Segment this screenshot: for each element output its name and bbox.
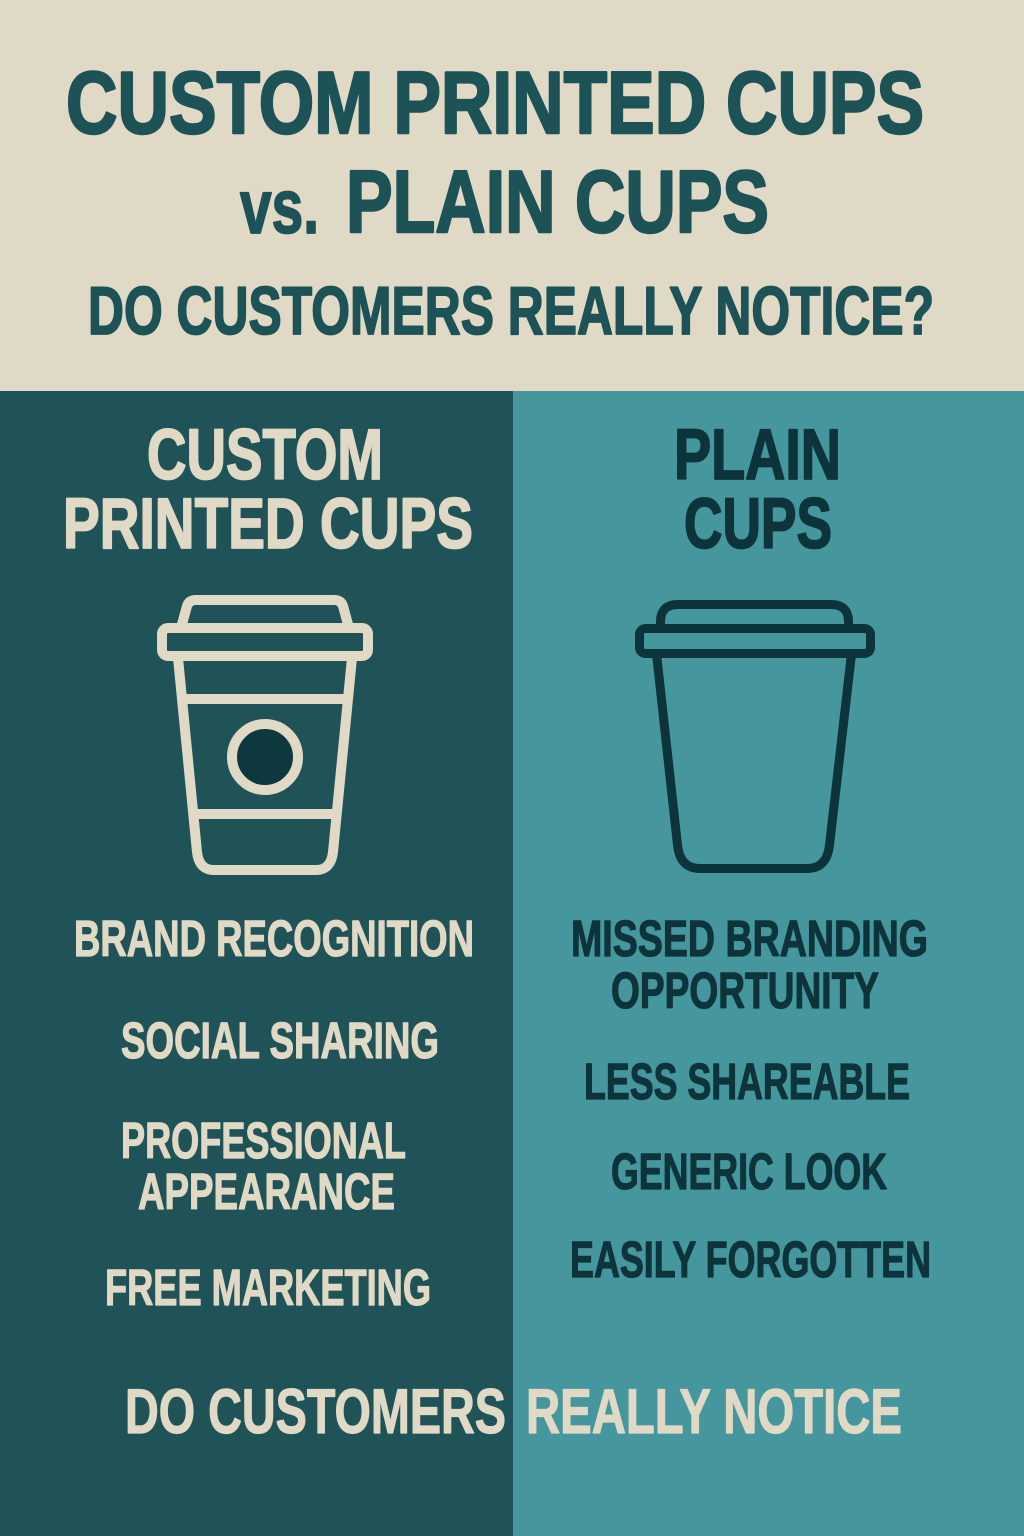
benefit: social sharing: SOCIAL SHARING	[121, 1012, 439, 1069]
panel: plain cups	[513, 391, 1024, 1536]
title line 2	[240, 152, 769, 251]
plain heading: CUPS	[684, 485, 832, 564]
benefit: professional appearance: APPEARANCE	[138, 1163, 395, 1220]
benefit: professional appearance: PROFESSIONAL	[121, 1112, 406, 1169]
plain heading	[674, 416, 841, 564]
benefit: professional appearance	[121, 1112, 406, 1220]
plain drawbacks list	[570, 910, 931, 1288]
panel: custom printed cups	[0, 391, 513, 1536]
custom heading: PRINTED CUPS	[63, 485, 473, 564]
icon: plain coffee cup	[640, 604, 870, 868]
icon: printed coffee cup	[162, 600, 368, 870]
drawback: missed branding opportunity	[571, 910, 928, 1019]
closing question: DO CUSTOMERS	[125, 1377, 506, 1447]
title line 2: vs.	[240, 165, 319, 250]
title line 2: PLAIN CUPS	[346, 152, 769, 251]
custom heading	[63, 416, 473, 564]
custom benefits list	[74, 910, 474, 1316]
benefit: free marketing: FREE MARKETING	[105, 1259, 431, 1316]
drawback: generic look: GENERIC LOOK	[611, 1143, 887, 1200]
benefit: brand recognition: BRAND RECOGNITION	[74, 910, 474, 967]
plain heading: PLAIN	[674, 416, 841, 495]
drawback: missed branding opportunity: OPPORTUNITY	[611, 962, 879, 1019]
header panel	[0, 0, 1024, 391]
closing question: REALLY NOTICE	[526, 1377, 902, 1447]
closing question	[125, 1377, 902, 1447]
custom heading: CUSTOM	[147, 416, 383, 495]
